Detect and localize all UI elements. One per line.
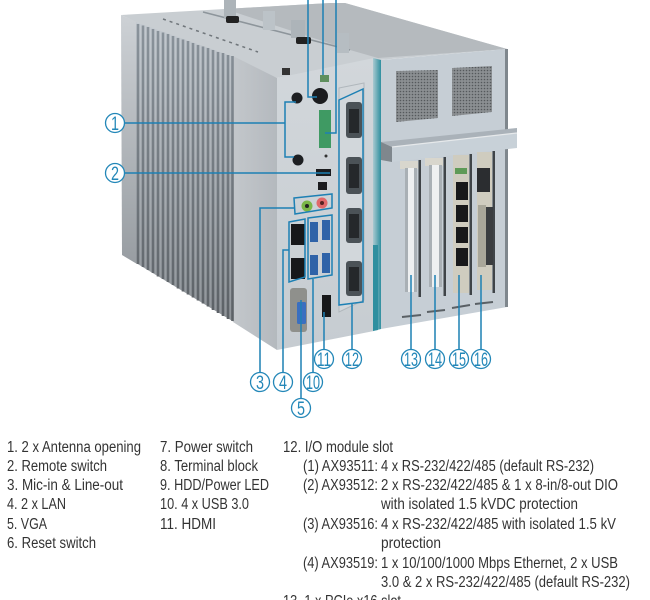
- legend column 3: (3) AX93516:: [303, 516, 378, 533]
- left strip: [121, 15, 137, 264]
- heat sink background: [136, 22, 234, 322]
- expansion section: [381, 49, 507, 329]
- top face: [121, 3, 507, 78]
- IO module frame: [339, 83, 364, 312]
- legend column 3: (2) AX93512:: [303, 477, 378, 494]
- antenna holes: [292, 92, 302, 104]
- front panel connectors: [282, 68, 364, 332]
- numbered callouts: 4: [279, 373, 287, 394]
- front panel: [277, 58, 374, 350]
- device: enclosure body: [121, 3, 517, 350]
- legend column 1: 2. Remote switch: [7, 458, 107, 475]
- legend column 1: [7, 439, 141, 552]
- HDMI port: [322, 295, 331, 317]
- slot tabs: [402, 302, 493, 317]
- numbered callouts: 10: [306, 373, 320, 394]
- legend column 2: 11. HDMI: [160, 516, 216, 533]
- legend column 3: 4 x RS-232/422/485 (default RS-232): [381, 458, 594, 475]
- legend column 1: 4. 2 x LAN: [7, 496, 66, 513]
- serial ports: [346, 102, 362, 138]
- expansion slots: [400, 151, 495, 317]
- legend column 2: 10. 4 x USB 3.0: [160, 496, 249, 513]
- slot 15: [453, 155, 469, 293]
- legend column 1: 5. VGA: [7, 516, 48, 533]
- USB ports: [310, 222, 318, 242]
- remote switch: [316, 169, 331, 176]
- legend column 3: 12. I/O module slot: [283, 439, 394, 456]
- legend column 1: 1. 2 x Antenna opening: [7, 439, 141, 456]
- ventilation meshes: [396, 70, 438, 122]
- numbered callouts: 16: [474, 350, 488, 371]
- legend column 3: with isolated 1.5 kVDC protection: [380, 496, 578, 513]
- logo: [282, 68, 290, 75]
- legend column 2: [160, 439, 269, 533]
- numbered callouts: 3: [256, 373, 264, 394]
- legend column 3: (4) AX93519:: [303, 555, 378, 572]
- slot 13: [400, 161, 418, 169]
- legend column 2: 9. HDD/Power LED: [160, 477, 269, 494]
- legend column 3: (1) AX93511:: [303, 458, 378, 475]
- numbered callouts: 2: [111, 164, 119, 185]
- audio jacks: [302, 200, 312, 212]
- LAN ports: [291, 224, 305, 245]
- numbered callouts: 1: [111, 114, 119, 135]
- VGA port: [290, 288, 307, 332]
- legend column 2: 7. Power switch: [160, 439, 253, 456]
- numbered callouts: 11: [317, 350, 331, 371]
- numbered callouts: 5: [297, 399, 305, 420]
- numbered callouts: 14: [428, 350, 442, 371]
- legend column 3: protection: [381, 535, 441, 552]
- legend column 2: 8. Terminal block: [160, 458, 258, 475]
- heat sink fins: [138, 24, 232, 321]
- numbered callouts: 12: [345, 350, 359, 371]
- reset dot: [324, 154, 328, 158]
- power switch: [312, 88, 328, 104]
- legend column 1: 6. Reset switch: [7, 535, 96, 552]
- smooth side section: [233, 56, 277, 350]
- antenna knobs on top: [163, 0, 350, 53]
- LED: [320, 75, 329, 82]
- numbered callouts: 15: [452, 350, 466, 371]
- numbered callouts: 13: [404, 350, 418, 371]
- slot 14: [425, 158, 443, 166]
- leader lines: [124, 0, 481, 398]
- teal strip: [373, 58, 381, 331]
- terminal block: [319, 110, 331, 148]
- legend column 1: 3. Mic-in & Line-out: [7, 477, 124, 494]
- legend column 3: [283, 439, 630, 600]
- numbered callouts: [106, 114, 490, 420]
- slot 16: [477, 152, 492, 290]
- legend column 3: 4 x RS-232/422/485 with isolated 1.5 kV: [381, 516, 617, 533]
- bracket bar: [392, 133, 517, 162]
- switch 2: [318, 182, 327, 190]
